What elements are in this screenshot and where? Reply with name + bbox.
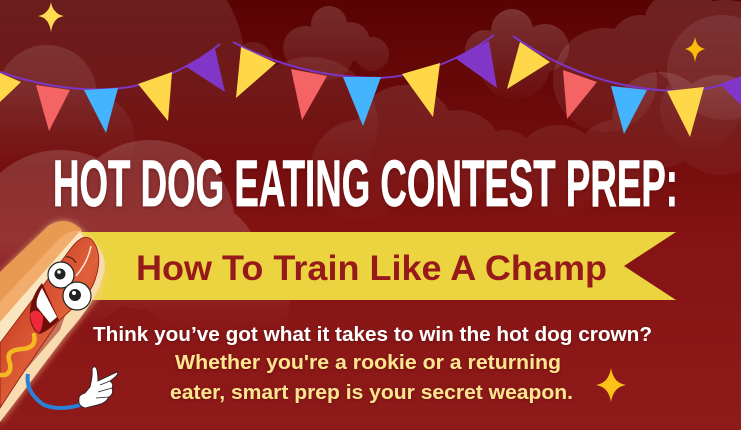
intro line 3: eater, smart prep is your secret weapon. xyxy=(170,382,573,404)
icon: sparkle top left xyxy=(38,2,64,32)
sausage xyxy=(0,237,99,408)
sausage highlight xyxy=(76,246,91,276)
bun back xyxy=(0,221,82,325)
banner xyxy=(75,232,676,300)
bun bottom xyxy=(0,240,105,422)
intro line 2: Whether you're a rookie or a returning xyxy=(175,352,561,374)
right eye xyxy=(63,282,91,310)
hot dog mascot xyxy=(0,220,118,425)
clouds xyxy=(0,0,741,305)
intro text xyxy=(93,324,652,404)
eyebrow xyxy=(66,257,76,263)
glove xyxy=(79,367,118,408)
mustard xyxy=(0,335,34,375)
bun cream xyxy=(0,231,84,343)
left eye xyxy=(48,262,74,288)
bunting flags xyxy=(0,41,741,137)
subtitle: How To Train Like A Champ xyxy=(136,249,607,288)
icon: sparkle bottom right xyxy=(596,368,626,402)
intro line 1: Think you’ve got what it takes to win the hot dog crown? xyxy=(93,324,652,346)
icon: sparkle top right xyxy=(685,37,705,62)
arm xyxy=(28,374,80,408)
mouth xyxy=(30,283,59,334)
bunting string xyxy=(0,35,741,91)
